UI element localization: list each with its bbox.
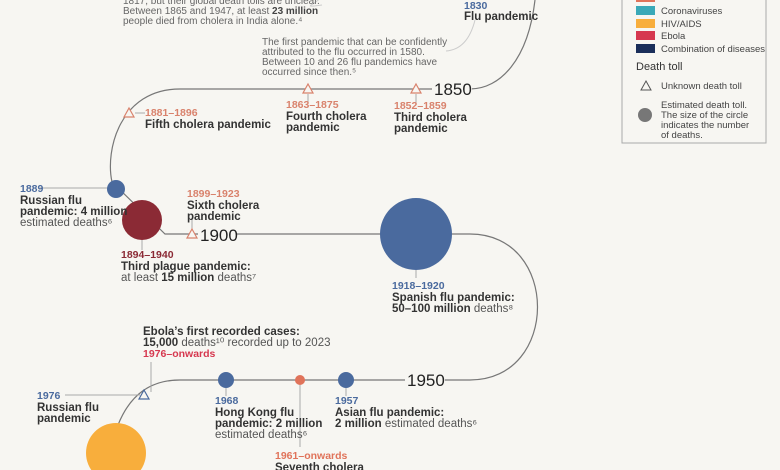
1852 label: pandemic (394, 123, 448, 135)
1976 triangle (139, 390, 149, 399)
1889 label: pandemic: 4 million (20, 206, 127, 218)
1918 label: 50–100 million deaths⁸ (392, 303, 513, 315)
1830 label: 1830 (464, 0, 488, 12)
1899 label: Sixth cholera (187, 200, 260, 212)
1881 label: 1881–1896 (145, 107, 198, 119)
1918 label: 1918–1920 (392, 280, 445, 292)
flu 1580 note: occurred since then.⁵ (262, 67, 356, 78)
year markers: 1900 (200, 226, 238, 245)
1968 label (215, 395, 322, 441)
1968 label: estimated deaths⁶ (215, 429, 308, 441)
1881 label (145, 107, 271, 131)
1899 label: 1899–1923 (187, 188, 240, 200)
1863 label: Fourth cholera (286, 111, 367, 123)
1968 label: pandemic: 2 million (215, 418, 322, 430)
legend (622, 0, 766, 143)
flu 1580 note: attributed to the flu occurred in 1580. (262, 47, 425, 58)
legend: Death toll (636, 61, 682, 73)
1957 label: 1957 (335, 395, 359, 407)
1957 label (335, 395, 477, 430)
1899 label: pandemic (187, 211, 241, 223)
legend: indicates the number (661, 120, 749, 131)
1863 label (286, 99, 367, 134)
legend: The size of the circle (661, 110, 748, 121)
1968 label: 1968 (215, 395, 239, 407)
circles (86, 180, 452, 470)
1894 label: Third plague pandemic: (121, 261, 251, 273)
top-left text (123, 0, 320, 27)
Ebola label: Ebola’s first recorded cases: (143, 326, 300, 338)
1863 label: pandemic (286, 122, 340, 134)
1830 label (464, 0, 539, 23)
1976 label (37, 390, 99, 425)
Ebola label: 1976–onwards (143, 348, 216, 360)
legend: Combination of diseases (661, 44, 765, 55)
legend: of deaths. (661, 130, 703, 141)
legend: Estimated death toll. (661, 100, 747, 111)
cholera triangles (124, 84, 421, 238)
1889 label (20, 183, 127, 229)
legend: Unknown death toll (661, 81, 742, 92)
1894 label: at least 15 million deaths⁷ (121, 272, 256, 284)
1894 label: 1894–1940 (121, 249, 174, 261)
1957 label: 2 million estimated deaths⁶ (335, 418, 477, 430)
1918 label: Spanish flu pandemic: (392, 292, 515, 304)
1976 label: 1976 (37, 390, 61, 402)
year markers: 1850 (434, 80, 472, 99)
1961 label: 1961–onwards (275, 450, 348, 462)
Ebola label (143, 326, 330, 360)
1976 label: Russian flu (37, 402, 99, 414)
1852 label: 1852–1859 (394, 100, 447, 112)
1894 label (121, 249, 256, 284)
flu 1580 note: Between 10 and 26 flu pandemics have (262, 57, 438, 68)
1961 label (275, 450, 364, 470)
flu 1580 note (262, 37, 447, 78)
top-left text: people died from cholera in India alone.⁴ (123, 16, 302, 27)
legend: Ebola (661, 31, 686, 42)
year markers (198, 80, 472, 390)
1852 label (394, 100, 467, 135)
year markers: 1950 (407, 371, 445, 390)
legend: HIV/AIDS (661, 19, 702, 30)
1899 label (187, 188, 260, 223)
legend: Coronaviruses (661, 6, 722, 17)
1918 label (392, 280, 515, 315)
1976 label: pandemic (37, 413, 91, 425)
1852 label: Third cholera (394, 112, 467, 124)
1957 label: Asian flu pandemic: (335, 407, 444, 419)
timeline path (110, 0, 537, 425)
flu 1580 note: The first pandemic that can be confidently (262, 37, 447, 48)
leader lines (40, 0, 475, 447)
1830 label: Flu pandemic (464, 11, 539, 23)
1889 label: 1889 (20, 183, 44, 195)
1889 label: Russian flu (20, 195, 82, 207)
Ebola label: 15,000 deaths¹⁰ recorded up to 2023 (143, 337, 330, 349)
1889 label: estimated deaths⁶ (20, 217, 113, 229)
1881 label: Fifth cholera pandemic (145, 119, 271, 131)
1863 label: 1863–1875 (286, 99, 339, 111)
1968 label: Hong Kong flu (215, 407, 294, 419)
top-left text: Between 1865 and 1947, at least 23 million (123, 6, 318, 17)
